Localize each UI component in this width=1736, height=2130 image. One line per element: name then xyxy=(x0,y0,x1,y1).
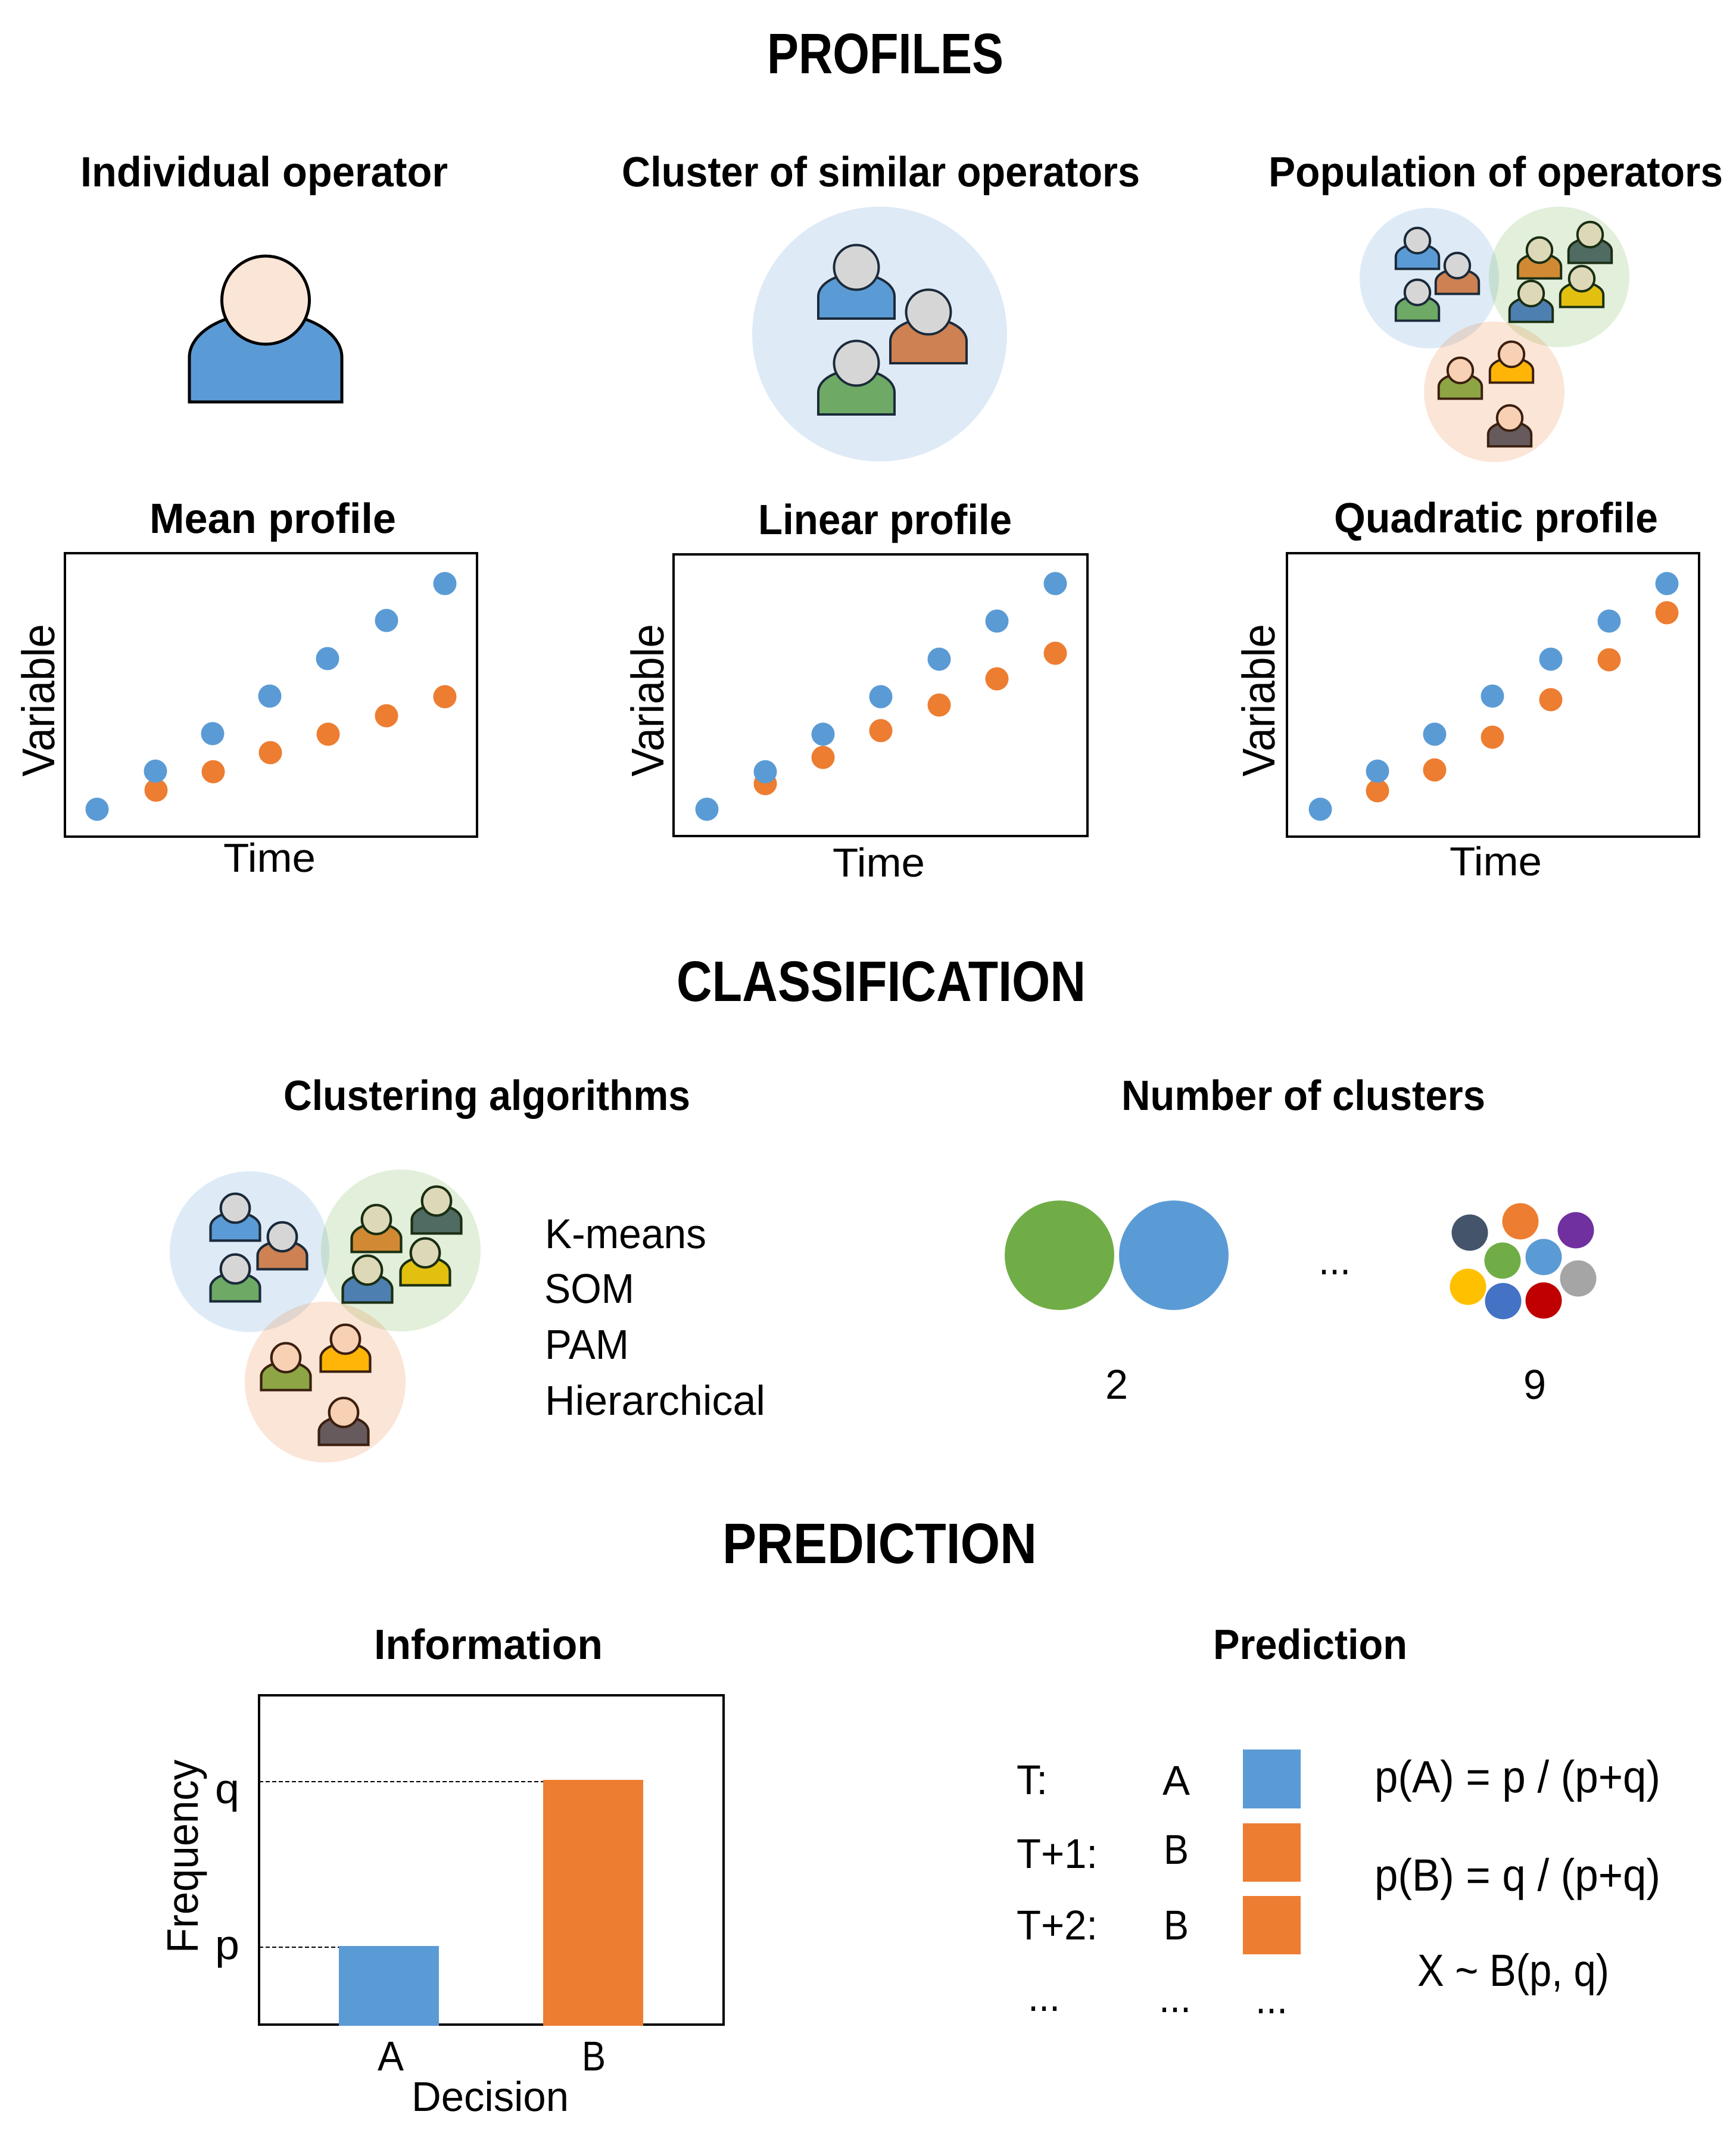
heading: Linear profile: Linear profile xyxy=(758,497,1012,544)
chart: quadratic profile: Variable xyxy=(1233,624,1285,776)
table: decision sequence: ... xyxy=(1028,1973,1060,2020)
heading: Number of clusters: Number of clusters xyxy=(1121,1072,1485,1119)
heading: Cluster of similar operators: Cluster of similar operators xyxy=(622,149,1140,196)
text: probability formulas: p(B) = q / (p+q) xyxy=(1375,1850,1660,1901)
chart: quadratic profile: Time xyxy=(1450,839,1542,884)
heading: Prediction: Prediction xyxy=(1213,1621,1407,1669)
heading: Mean profile: Mean profile xyxy=(149,495,396,542)
icon: individual operator xyxy=(189,256,342,402)
icon: nine clusters xyxy=(1450,1203,1596,1320)
title: PROFILES: PROFILES xyxy=(767,22,1003,86)
chart: mean profile: Variable xyxy=(13,624,64,776)
text: algorithm list: PAM xyxy=(545,1321,629,1368)
chart: decision frequency bar chart: A xyxy=(378,2033,404,2079)
icon: operator clusters xyxy=(170,1170,481,1462)
chart: decision frequency bar chart: B xyxy=(582,2033,606,2079)
text: number 9: 9 xyxy=(1523,1361,1546,1408)
heading: Information: Information xyxy=(374,1621,603,1669)
table: decision sequence: B xyxy=(1164,1826,1189,1873)
table: decision sequence xyxy=(1017,1749,1301,2022)
chart: mean profile xyxy=(13,553,477,881)
table: decision sequence: ... xyxy=(1159,1975,1191,2021)
text: number 2: 2 xyxy=(1105,1361,1128,1408)
chart: decision frequency bar chart xyxy=(158,1695,724,2120)
text: algorithm list: K-means xyxy=(545,1211,706,1257)
chart: mean profile: Time xyxy=(223,835,316,881)
text: algorithm list xyxy=(544,1211,765,1424)
icon: two clusters xyxy=(1005,1200,1229,1310)
text: probability formulas xyxy=(1375,1752,1660,1996)
text: algorithm list: SOM xyxy=(544,1265,634,1312)
table: decision sequence: T: xyxy=(1017,1757,1048,1803)
heading: Population of operators: Population of operators xyxy=(1269,149,1723,196)
chart: decision frequency bar chart: Decision xyxy=(412,2073,569,2120)
chart: quadratic profile xyxy=(1233,553,1699,884)
title: PREDICTION: PREDICTION xyxy=(722,1512,1037,1576)
table: decision sequence: T+2: xyxy=(1017,1902,1098,1948)
table: decision sequence: A xyxy=(1162,1757,1190,1804)
heading: Clustering algorithms: Clustering algorithms xyxy=(283,1072,690,1119)
chart: linear profile: Time xyxy=(833,840,925,885)
text: algorithm list: Hierarchical xyxy=(545,1377,765,1424)
table: decision sequence: B xyxy=(1164,1902,1189,1948)
chart: decision frequency bar chart: Frequency xyxy=(158,1760,207,1953)
title: CLASSIFICATION: CLASSIFICATION xyxy=(677,950,1086,1013)
chart: linear profile: Variable xyxy=(622,624,674,776)
icon: population of operators xyxy=(1360,207,1629,462)
text: probability formulas: X ~ B(p, q) xyxy=(1417,1945,1609,1996)
text: ellipsis between cluster counts: ... xyxy=(1319,1237,1351,1283)
chart: linear profile xyxy=(622,554,1087,885)
icon: cluster of similar operators xyxy=(752,207,1007,461)
heading: Quadratic profile: Quadratic profile xyxy=(1334,495,1658,542)
text: probability formulas: p(A) = p / (p+q) xyxy=(1375,1752,1660,1802)
table: decision sequence: T+1: xyxy=(1017,1830,1098,1877)
table: decision sequence: ... xyxy=(1255,1976,1288,2022)
tick label: p: p xyxy=(215,1922,239,1968)
heading: Individual operator: Individual operator xyxy=(80,149,448,196)
tick label: q: q xyxy=(215,1766,239,1812)
